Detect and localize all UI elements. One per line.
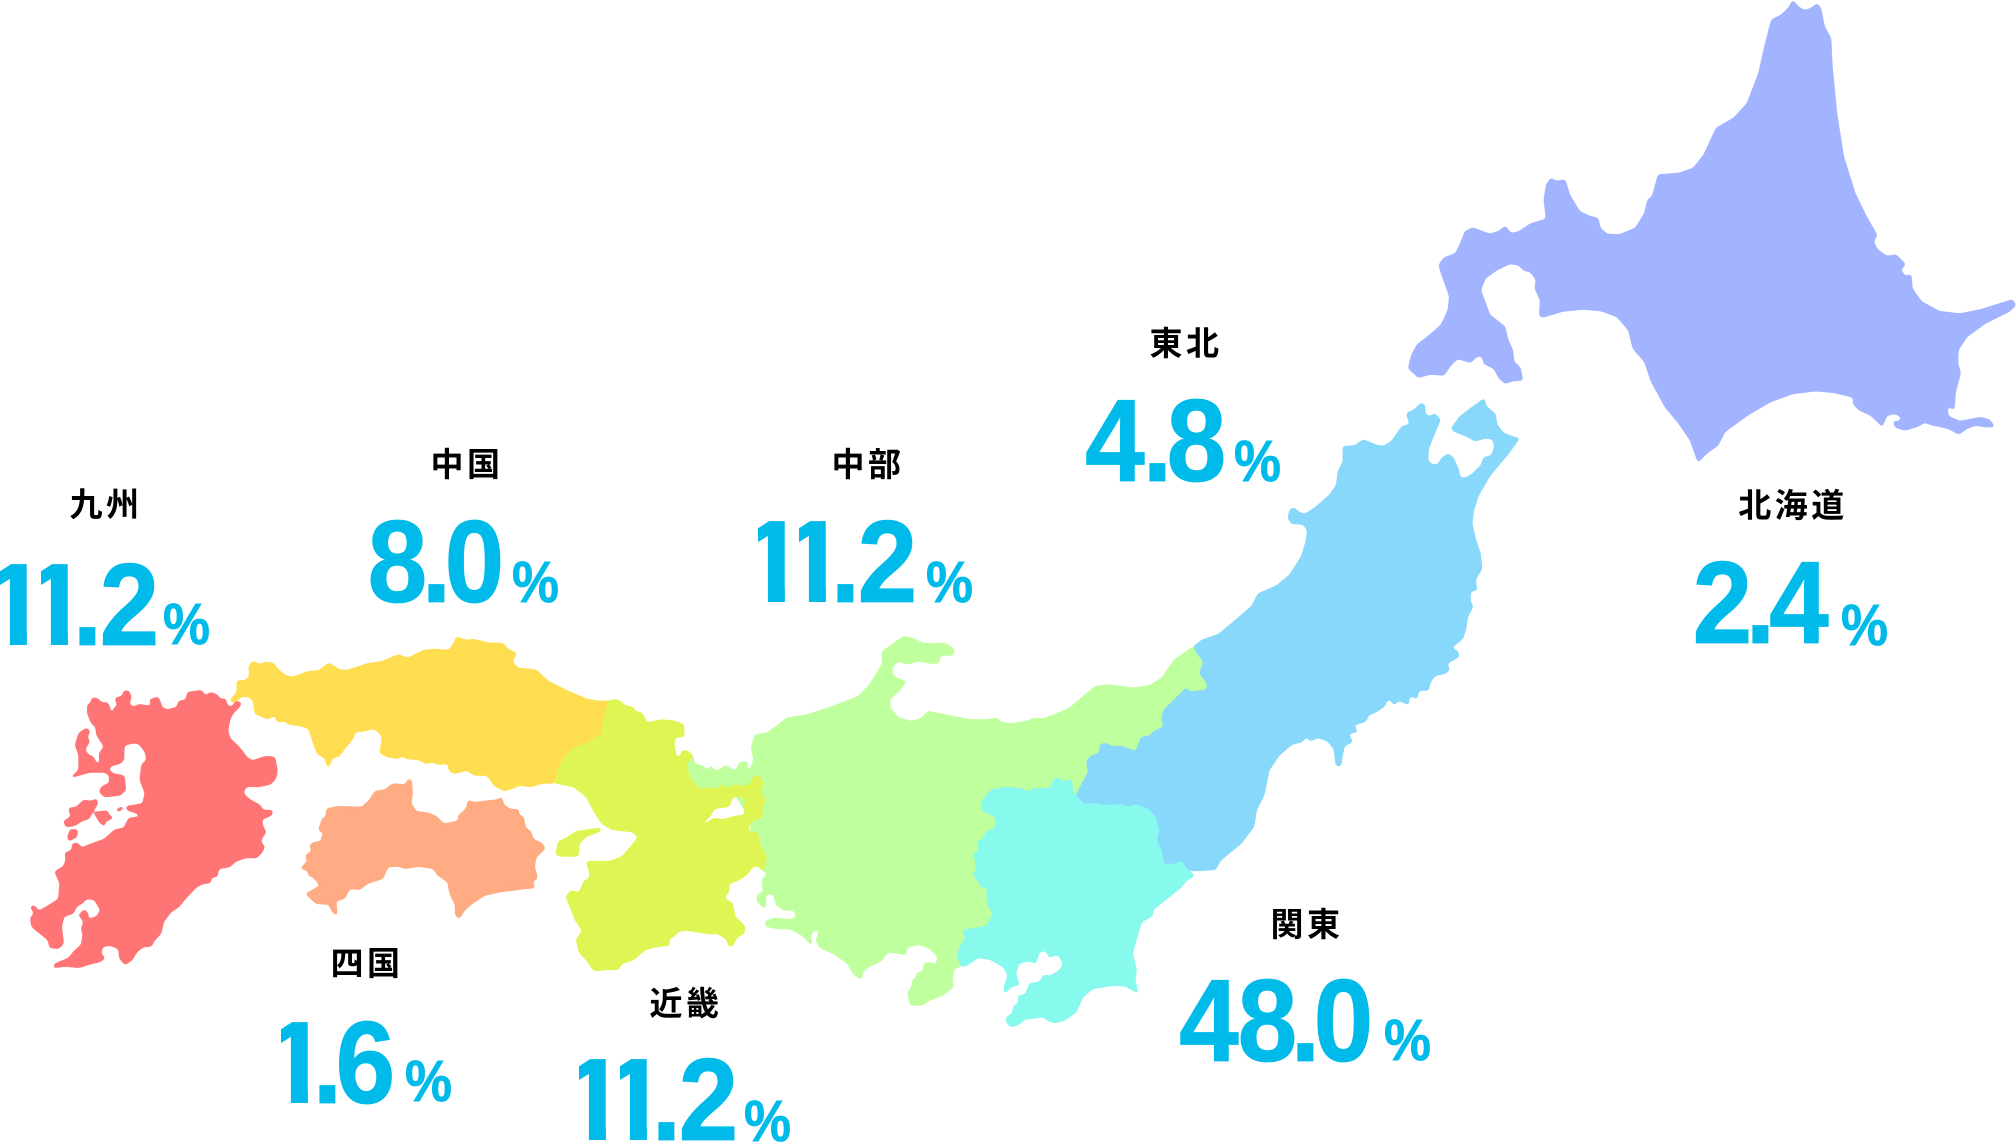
stat: Shikoku 1.6%: .6	[313, 997, 395, 1128]
stat: Hokkaido 2.4%	[1693, 487, 1888, 668]
stat: Chubu 11.2%: %	[926, 550, 973, 615]
region: Kinki	[555, 700, 766, 971]
stat: Kyushu 11.2%	[0, 488, 209, 646]
stat: Kinki 11.2%: 近畿	[650, 985, 722, 1022]
stat: Kanto 48.0%	[1179, 906, 1431, 1086]
stat: Kanto 48.0%: %	[1384, 1008, 1431, 1073]
stat: Hokkaido 2.4%: 北海道	[1738, 487, 1848, 524]
stat: Chugoku 8.0%: %	[512, 550, 559, 615]
stat: Chubu 11.2%	[758, 448, 972, 603]
stat: Shikoku 1.6%: 四国	[330, 945, 404, 982]
stat: Shikoku 1.6%: %	[405, 1049, 452, 1114]
stat: Kanto 48.0%: 48.0	[1179, 955, 1373, 1086]
stat: Chubu 11.2%: .2	[830, 496, 917, 627]
stat: Chugoku 8.0%: 中国	[430, 446, 504, 483]
stat: Kyushu 11.2%: %	[163, 592, 210, 657]
stat: Tohoku 4.8%: 東北	[1150, 325, 1222, 362]
stat: Chugoku 8.0%	[368, 446, 559, 627]
region: Chubu	[686, 637, 1208, 1005]
stat: Chubu 11.2%: 1	[741, 496, 806, 627]
region: Chugoku	[231, 637, 608, 791]
stat: Chubu 11.2%: 中部	[832, 446, 904, 483]
region: Kanto	[958, 778, 1194, 1027]
stat: Kyushu 11.2%: .2	[72, 539, 159, 670]
stat: Tohoku 4.8%: 4.8	[1085, 375, 1226, 506]
stat: Chubu 11.2%: 1	[782, 496, 847, 627]
region: Kyushu	[31, 691, 277, 967]
stat: Shikoku 1.6%: 1	[264, 997, 329, 1128]
region: Tohoku	[1077, 399, 1519, 871]
stat: Tohoku 4.8%: %	[1234, 429, 1281, 494]
stat: Shikoku 1.6%	[281, 948, 451, 1104]
region: Hokkaido	[1409, 1, 2015, 462]
region: Shikoku	[301, 779, 545, 918]
stat: Kyushu 11.2%: 九州	[70, 486, 142, 523]
stat: Hokkaido 2.4%: %	[1841, 593, 1888, 658]
stat: Chugoku 8.0%: 8.0	[368, 496, 504, 627]
stat: Kinki 11.2%	[562, 985, 791, 1144]
stat: Kyushu 11.2%: 1	[24, 539, 89, 670]
stat: Kanto 48.0%: 関東	[1270, 906, 1344, 943]
stat: Hokkaido 2.4%: 2.4	[1693, 537, 1829, 668]
stat: Tohoku 4.8%	[1085, 325, 1281, 506]
